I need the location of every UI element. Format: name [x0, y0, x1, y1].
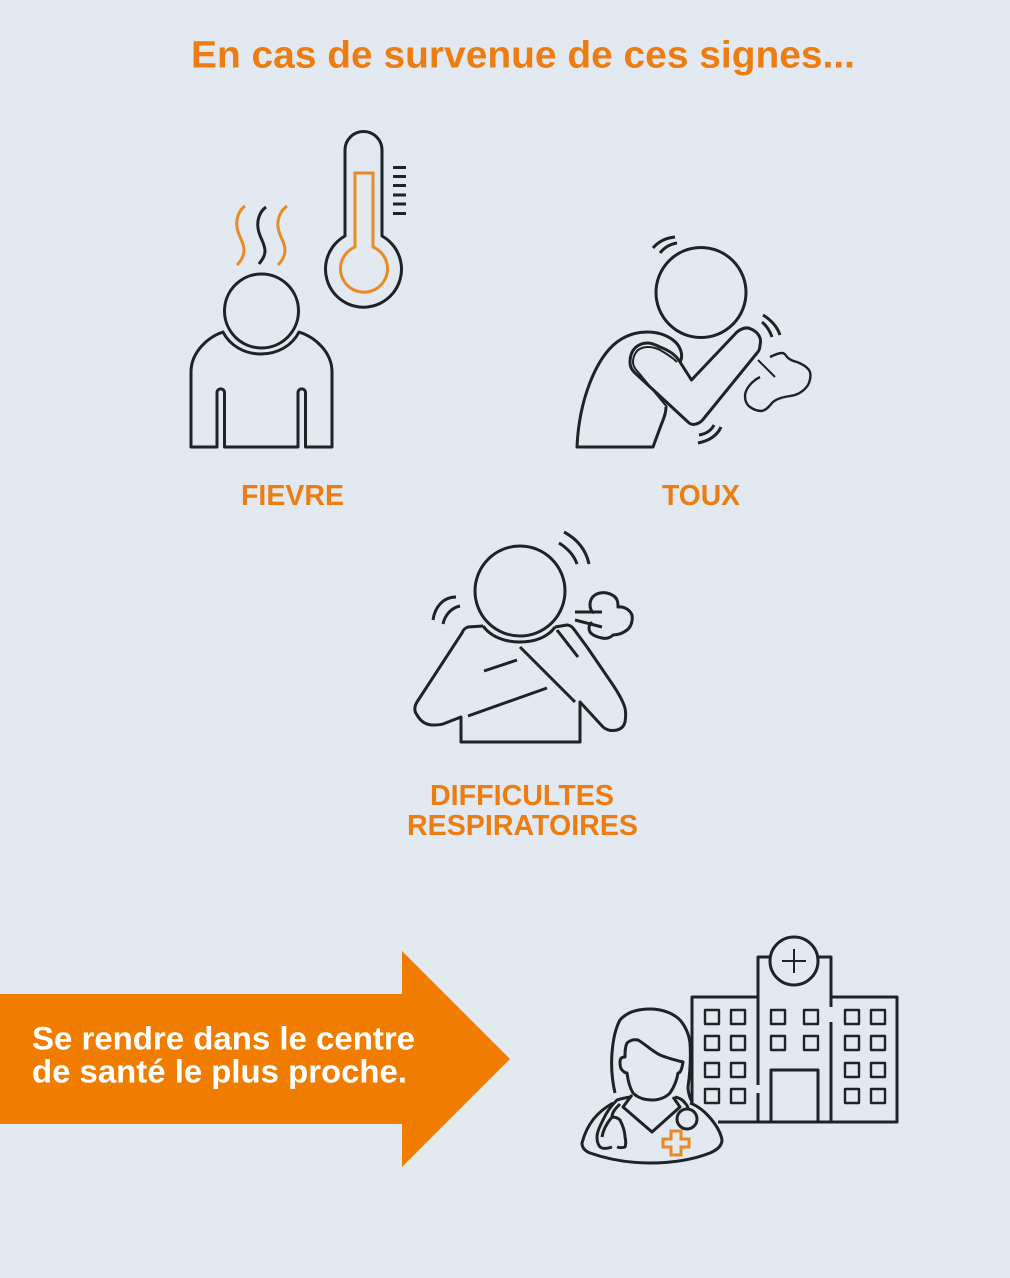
head	[656, 248, 746, 338]
icon: heat waves	[237, 206, 287, 265]
arm	[630, 328, 761, 424]
icon: fever person	[191, 274, 332, 447]
icon: hospital	[692, 937, 897, 1122]
orange cross	[663, 1131, 689, 1155]
collar	[483, 626, 555, 642]
arrow callout: de santé le plus proche.	[32, 1054, 407, 1090]
label: breathing difficulty: RESPIRATOIRES	[407, 810, 638, 842]
motion lines	[653, 237, 677, 253]
icon: doctor	[582, 1009, 722, 1163]
arrow callout: Se rendre dans le centre	[32, 1020, 415, 1056]
cough cloud	[758, 360, 775, 377]
label: cough: TOUX	[662, 480, 740, 512]
head	[475, 546, 565, 636]
collar	[623, 1095, 680, 1132]
icon: fever person with thermometer	[191, 132, 406, 447]
arrow callout	[0, 951, 510, 1167]
face	[620, 1040, 683, 1100]
top cross sign	[770, 937, 818, 985]
motion lines	[433, 597, 460, 624]
arm lines	[468, 630, 578, 716]
label: breathing difficulty	[407, 780, 638, 842]
label: fever: FIEVRE	[241, 480, 344, 512]
windows	[705, 1010, 885, 1103]
label: breathing difficulty: DIFFICULTES	[430, 780, 614, 812]
breath cloud	[575, 612, 602, 627]
stethoscope	[597, 1097, 688, 1148]
title: En cas de survenue de ces signes...	[191, 34, 855, 76]
shoulders	[582, 1103, 722, 1163]
hair	[612, 1009, 692, 1102]
door	[771, 1070, 818, 1122]
icon: coughing person	[577, 237, 810, 447]
body and crossed arms	[415, 625, 626, 742]
icon: person with breathing difficulty	[415, 532, 632, 742]
icon: thermometer	[326, 132, 406, 307]
body	[577, 332, 682, 447]
building outline	[692, 957, 897, 1122]
doctor backing shape	[582, 1103, 722, 1163]
inner arm line	[633, 347, 677, 407]
